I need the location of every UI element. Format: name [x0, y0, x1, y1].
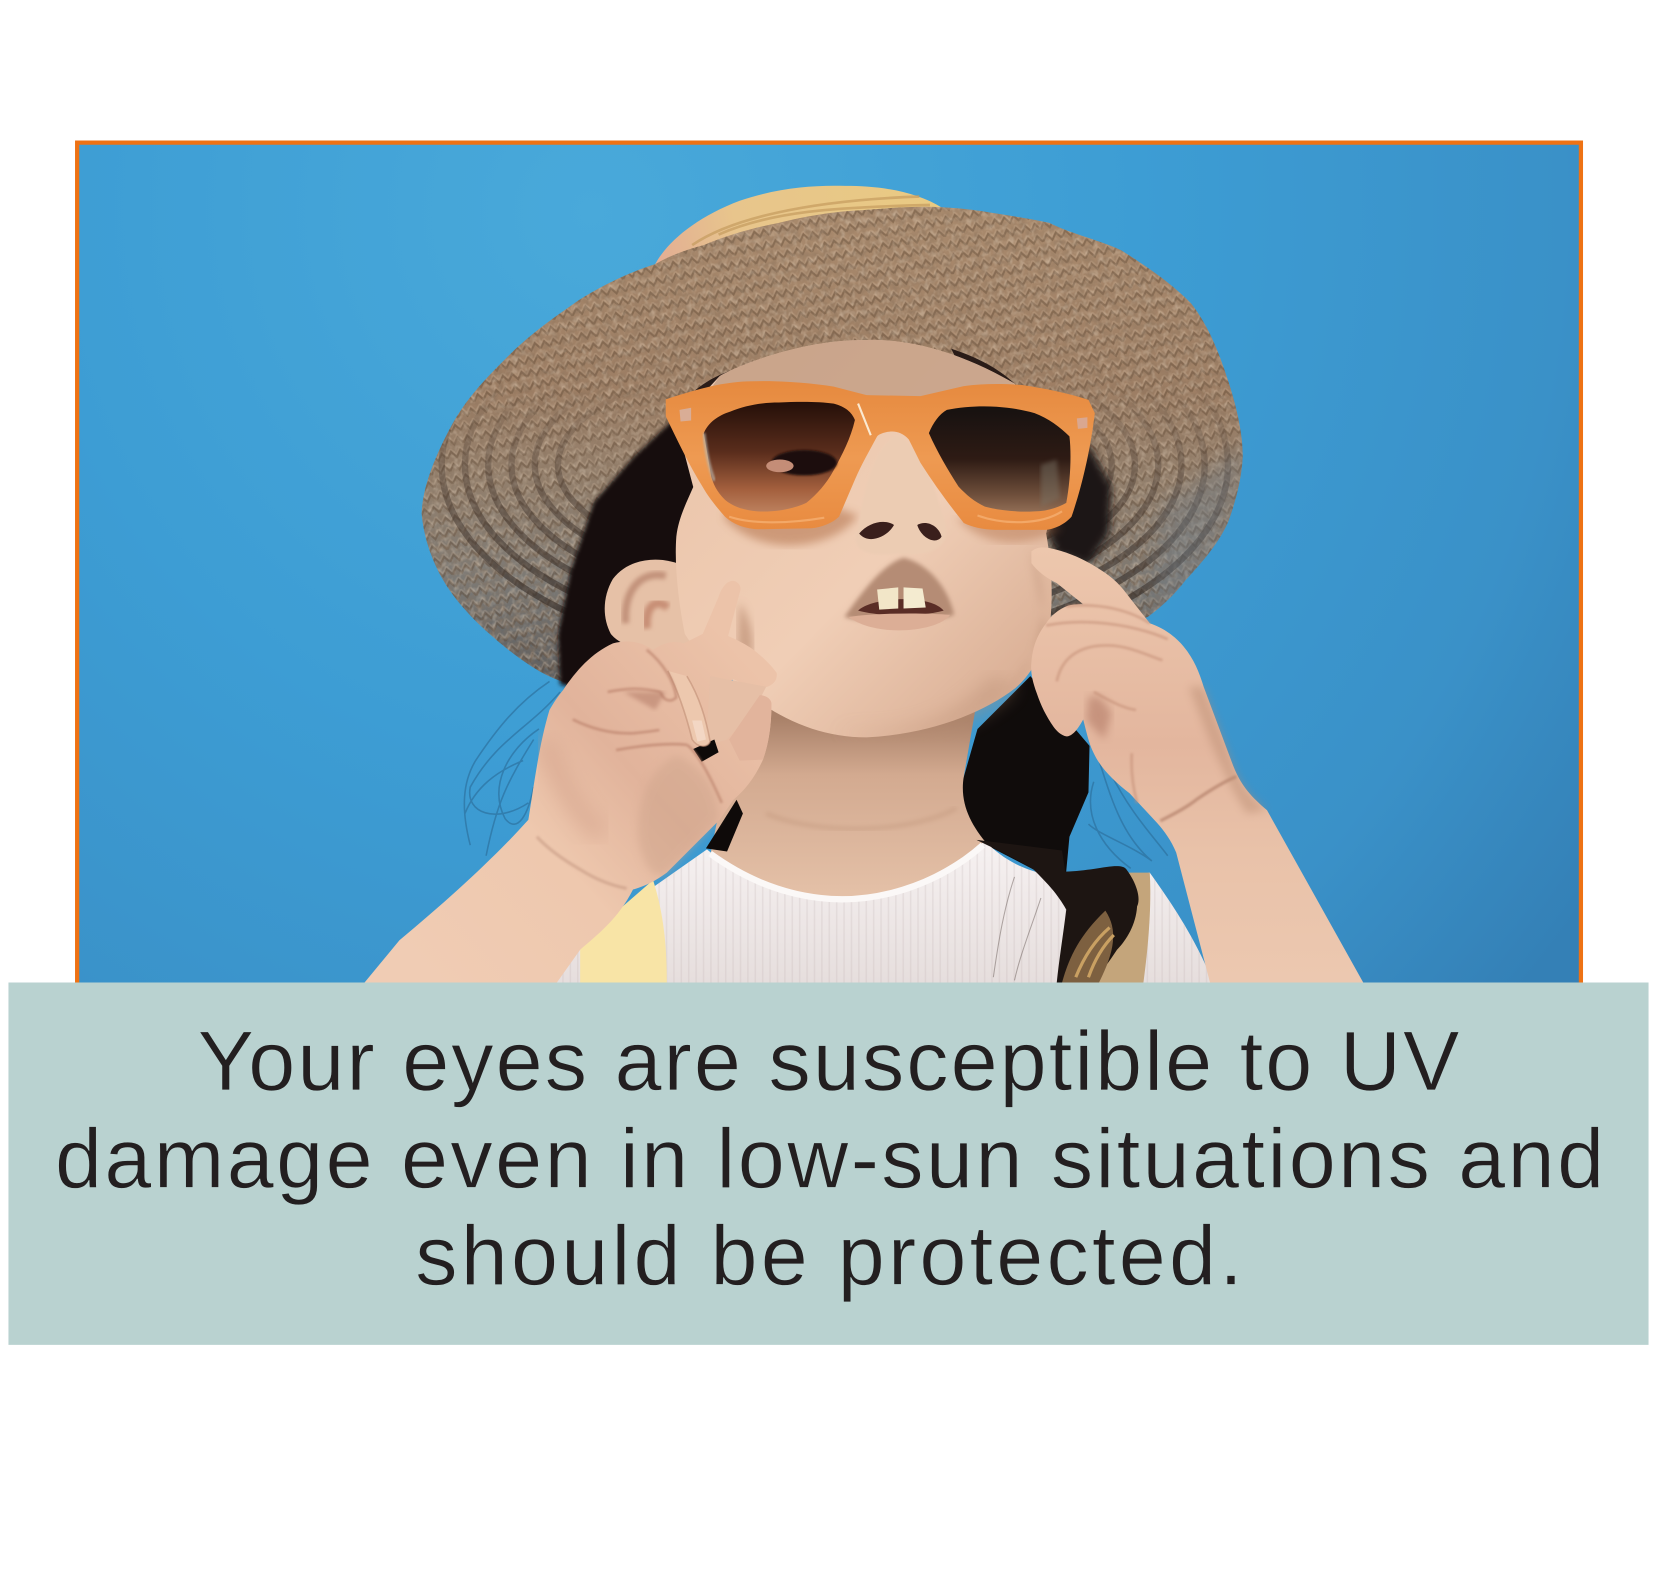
- soft jaw shade: [835, 676, 1014, 737]
- caption band: [8, 982, 1649, 1345]
- left hand and arm: [365, 581, 777, 982]
- stray hair strands against the backdrop: [464, 681, 1168, 868]
- nose: [856, 435, 946, 555]
- neck: [710, 697, 988, 930]
- hair framing the face: [558, 349, 1112, 882]
- neck crease: [766, 808, 956, 829]
- ear: [605, 560, 692, 652]
- glasses shadow on cheeks: [724, 507, 858, 545]
- photo backdrop with orange border: [77, 143, 1581, 998]
- finger shadow on cheek: [738, 602, 753, 663]
- caption text: Your eyes are susceptible to UV: [198, 1013, 1459, 1108]
- caption text: damage even in low-sun situations and: [55, 1110, 1604, 1205]
- caption text: should be protected.: [415, 1208, 1243, 1303]
- face: [676, 340, 1067, 737]
- caption text: [55, 1013, 1604, 1303]
- photo panel: child with straw hat and orange sunglasses: [77, 143, 1581, 998]
- mouth: [844, 558, 954, 623]
- orange sunglasses: [666, 381, 1095, 530]
- shirt and straps: [550, 841, 1213, 982]
- infographic canvas: [8, 140, 1648, 1345]
- right hand and arm: [1031, 547, 1363, 982]
- band background: [8, 982, 1649, 1345]
- long hair falling over the shoulder: [976, 840, 1139, 982]
- straw hat: [402, 186, 1258, 708]
- hat brim: [422, 207, 1243, 697]
- gap between fingers: [706, 676, 766, 746]
- dark hair visible under the hand: [706, 800, 743, 852]
- hat crown: [655, 186, 943, 264]
